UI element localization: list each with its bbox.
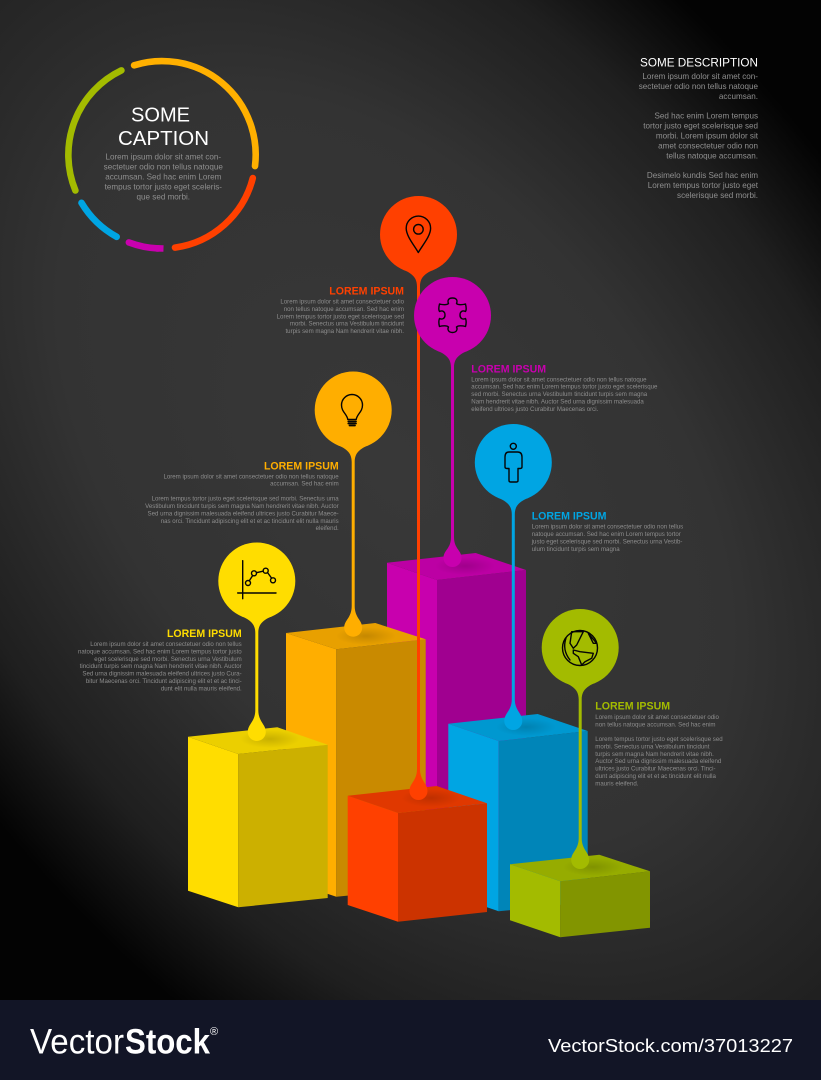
footer band (0, 1000, 821, 1080)
description text: Sed hac enim Lorem tempus (655, 112, 758, 121)
text block: green: mauris eleifend. (595, 780, 639, 787)
text block: magenta: Lorem ipsum dolor sit amet consectetuer odio non tellus natoque (471, 376, 647, 383)
text block: red: turpis sem magna Nam hendrerit vitae nibh. (285, 328, 404, 335)
text block: yellow: eget scelerisque sed morbi. Senectus urna Vestibulum (94, 656, 242, 663)
text block: green: ultrices justo Curabitur Maecenas orci. Tinci- (595, 766, 716, 773)
pin: amber (315, 372, 392, 637)
icon: globe (562, 630, 598, 666)
description text: accumsan. (719, 92, 758, 101)
pin: yellow (218, 542, 295, 741)
caption text: que sed morbi. (137, 192, 190, 201)
text block: green: non tellus natoque accumsan. Sed hac enim (595, 721, 716, 728)
ring arc: blue (82, 203, 117, 237)
text block: amber: nas orci. Tincidunt adipiscing elit et et ac tincidunt elit nulla mauris (161, 518, 339, 525)
text block: magenta: sed morbi. Senectus urna Vestibulum tincidunt turpis sem magna (471, 391, 648, 398)
text block: magenta: accumsan. Sed hac enim Lorem tempus tortor justo eget scelerisque (471, 384, 658, 391)
text block: blue: Lorem ipsum dolor sit amet consectetuer odio non tellus (532, 524, 683, 531)
text block: green (595, 701, 723, 787)
text block: red: non tellus natoque accumsan. Sed hac enim (284, 306, 404, 313)
description text (639, 72, 759, 200)
text block: yellow: dunt elit nulla mauris eleifend. (161, 685, 242, 692)
text block: amber (145, 460, 339, 532)
text block: green: morbi. Senectus urna Vestibulum tincidunt (595, 743, 710, 750)
description text: tortor justo eget scelerisque sed (643, 122, 758, 131)
icon: light bulb (342, 395, 362, 426)
description text: scelerisque sed morbi. (677, 191, 758, 200)
text block: blue: natoque accumsan. Sed hac enim Lorem tempus tortor (532, 531, 681, 538)
description text: sectetuer odio non tellus natoque (639, 82, 758, 91)
text block: yellow (78, 628, 242, 692)
text block: yellow: LOREM IPSUM (167, 628, 242, 640)
bar: magenta (387, 553, 526, 860)
description text: amet consectetuer odio non (658, 142, 758, 151)
text block: yellow: natoque accumsan. Sed hac enim Lorem tempus tortor justo (78, 648, 242, 655)
text block: red (277, 286, 405, 335)
text block: green: Lorem tempus tortor justo eget scelerisque sed (595, 736, 723, 743)
description text: Lorem ipsum dolor sit amet con- (642, 72, 758, 81)
ring arc: green (68, 70, 121, 190)
text block: red: morbi. Senectus urna Vestibulum tincidunt (290, 321, 404, 328)
text block: green: Auctor Sed urna dignissim malesuada eleifend (595, 758, 721, 765)
text block: amber: Sed urna dignissim malesuada eleifend ultrices justo Curabitur Maece- (148, 510, 339, 517)
footer logo: Vector (30, 1022, 124, 1061)
text block: magenta (471, 363, 658, 413)
text block: green: dunt adipiscing elit et et ac tincidunt elit nulla (595, 773, 716, 780)
description text: tellus natoque accumsan. (666, 152, 758, 161)
icon: puzzle piece (439, 298, 466, 332)
caption text (104, 152, 223, 201)
caption title: CAPTION (118, 127, 209, 150)
ring arc: red (175, 178, 253, 248)
caption text: sectetuer odio non tellus natoque (104, 162, 223, 171)
pin: red (380, 196, 457, 800)
text block: magenta: LOREM IPSUM (471, 363, 546, 375)
text block: amber: accumsan. Sed hac enim (270, 481, 339, 488)
footer url: VectorStock.com/37013227 (548, 1035, 793, 1056)
footer logo: Stock (125, 1022, 210, 1061)
pin: blue (475, 424, 552, 730)
text block: magenta: Nam hendrerit vitae nibh. Auctor Sed urna dignissim malesuada (471, 398, 644, 405)
text block: blue: LOREM IPSUM (532, 511, 607, 523)
text block: yellow: tincidunt turpis sem magna Nam hendrerit vitae nibh. Auctor (80, 663, 242, 670)
text block: red: LOREM IPSUM (329, 286, 404, 298)
bar: red (348, 786, 487, 922)
text block: amber: Lorem tempus tortor justo eget scelerisque sed morbi. Senectus urna (152, 496, 339, 503)
ring arc: amber (134, 61, 256, 166)
description text: morbi. Lorem ipsum dolor sit (656, 132, 759, 141)
text block: yellow: Lorem ipsum dolor sit amet consectetuer odio non tellus (90, 641, 242, 648)
caption text: accumsan. Sed hac enim Lorem (105, 172, 222, 181)
text block: green: Lorem ipsum dolor sit amet consectetuer odio (595, 714, 720, 721)
text block: red: Lorem tempus tortor justo eget scelerisque sed (277, 313, 404, 320)
text block: green: LOREM IPSUM (595, 701, 670, 713)
caption text: tempus tortor justo eget sceleris- (105, 182, 222, 191)
icon: line chart (238, 561, 276, 599)
text block: red: Lorem ipsum dolor sit amet consectetuer odio (280, 299, 405, 306)
bar: blue (448, 714, 588, 911)
text block: magenta: eleifend ultrices justo Curabitur Maecenas orci. (471, 406, 599, 413)
description text: Desimelo kundis Sed hac enim (647, 171, 758, 180)
text block: blue: justo eget scelerisque sed morbi. Senectus urna Vestib- (531, 538, 682, 546)
text block: amber: Lorem ipsum dolor sit amet consectetuer odio non tellus natoque (163, 473, 339, 480)
pin: magenta (414, 277, 491, 567)
ring arc: magenta (129, 242, 164, 248)
text block: green: turpis sem magna Nam hendrerit vitae nibh. (595, 751, 714, 758)
caption title: SOME (131, 104, 190, 127)
pin: green (542, 609, 619, 869)
description heading: SOME DESCRIPTION (640, 57, 758, 70)
text block: blue (531, 511, 683, 553)
footer logo: ® (210, 1026, 218, 1038)
text block: amber: LOREM IPSUM (264, 460, 339, 472)
text block: yellow: Sed urna dignissim malesuada eleifend ultrices justo Cura- (82, 671, 242, 678)
text block: amber: Vestibulum tincidunt turpis sem magna Nam hendrerit vitae nibh. Auctor (145, 503, 339, 510)
text block: amber: eleifend. (316, 525, 339, 532)
text block: blue: ulum tincidunt turpis sem magna (532, 546, 620, 553)
caption title (118, 104, 209, 150)
icon: person (505, 443, 522, 482)
caption ring (68, 61, 256, 249)
icon: map marker (406, 216, 431, 252)
bar: yellow (188, 727, 328, 907)
description text: Lorem tempus tortor justo eget (648, 181, 759, 190)
text block: yellow: bitur Maecenas orci. Tincidunt adipiscing elit et et ac tinci- (86, 678, 242, 685)
footer logo (30, 1022, 218, 1061)
bar: orange (286, 623, 426, 897)
caption text: Lorem ipsum dolor sit amet con- (105, 152, 221, 161)
bar: green (510, 855, 650, 937)
